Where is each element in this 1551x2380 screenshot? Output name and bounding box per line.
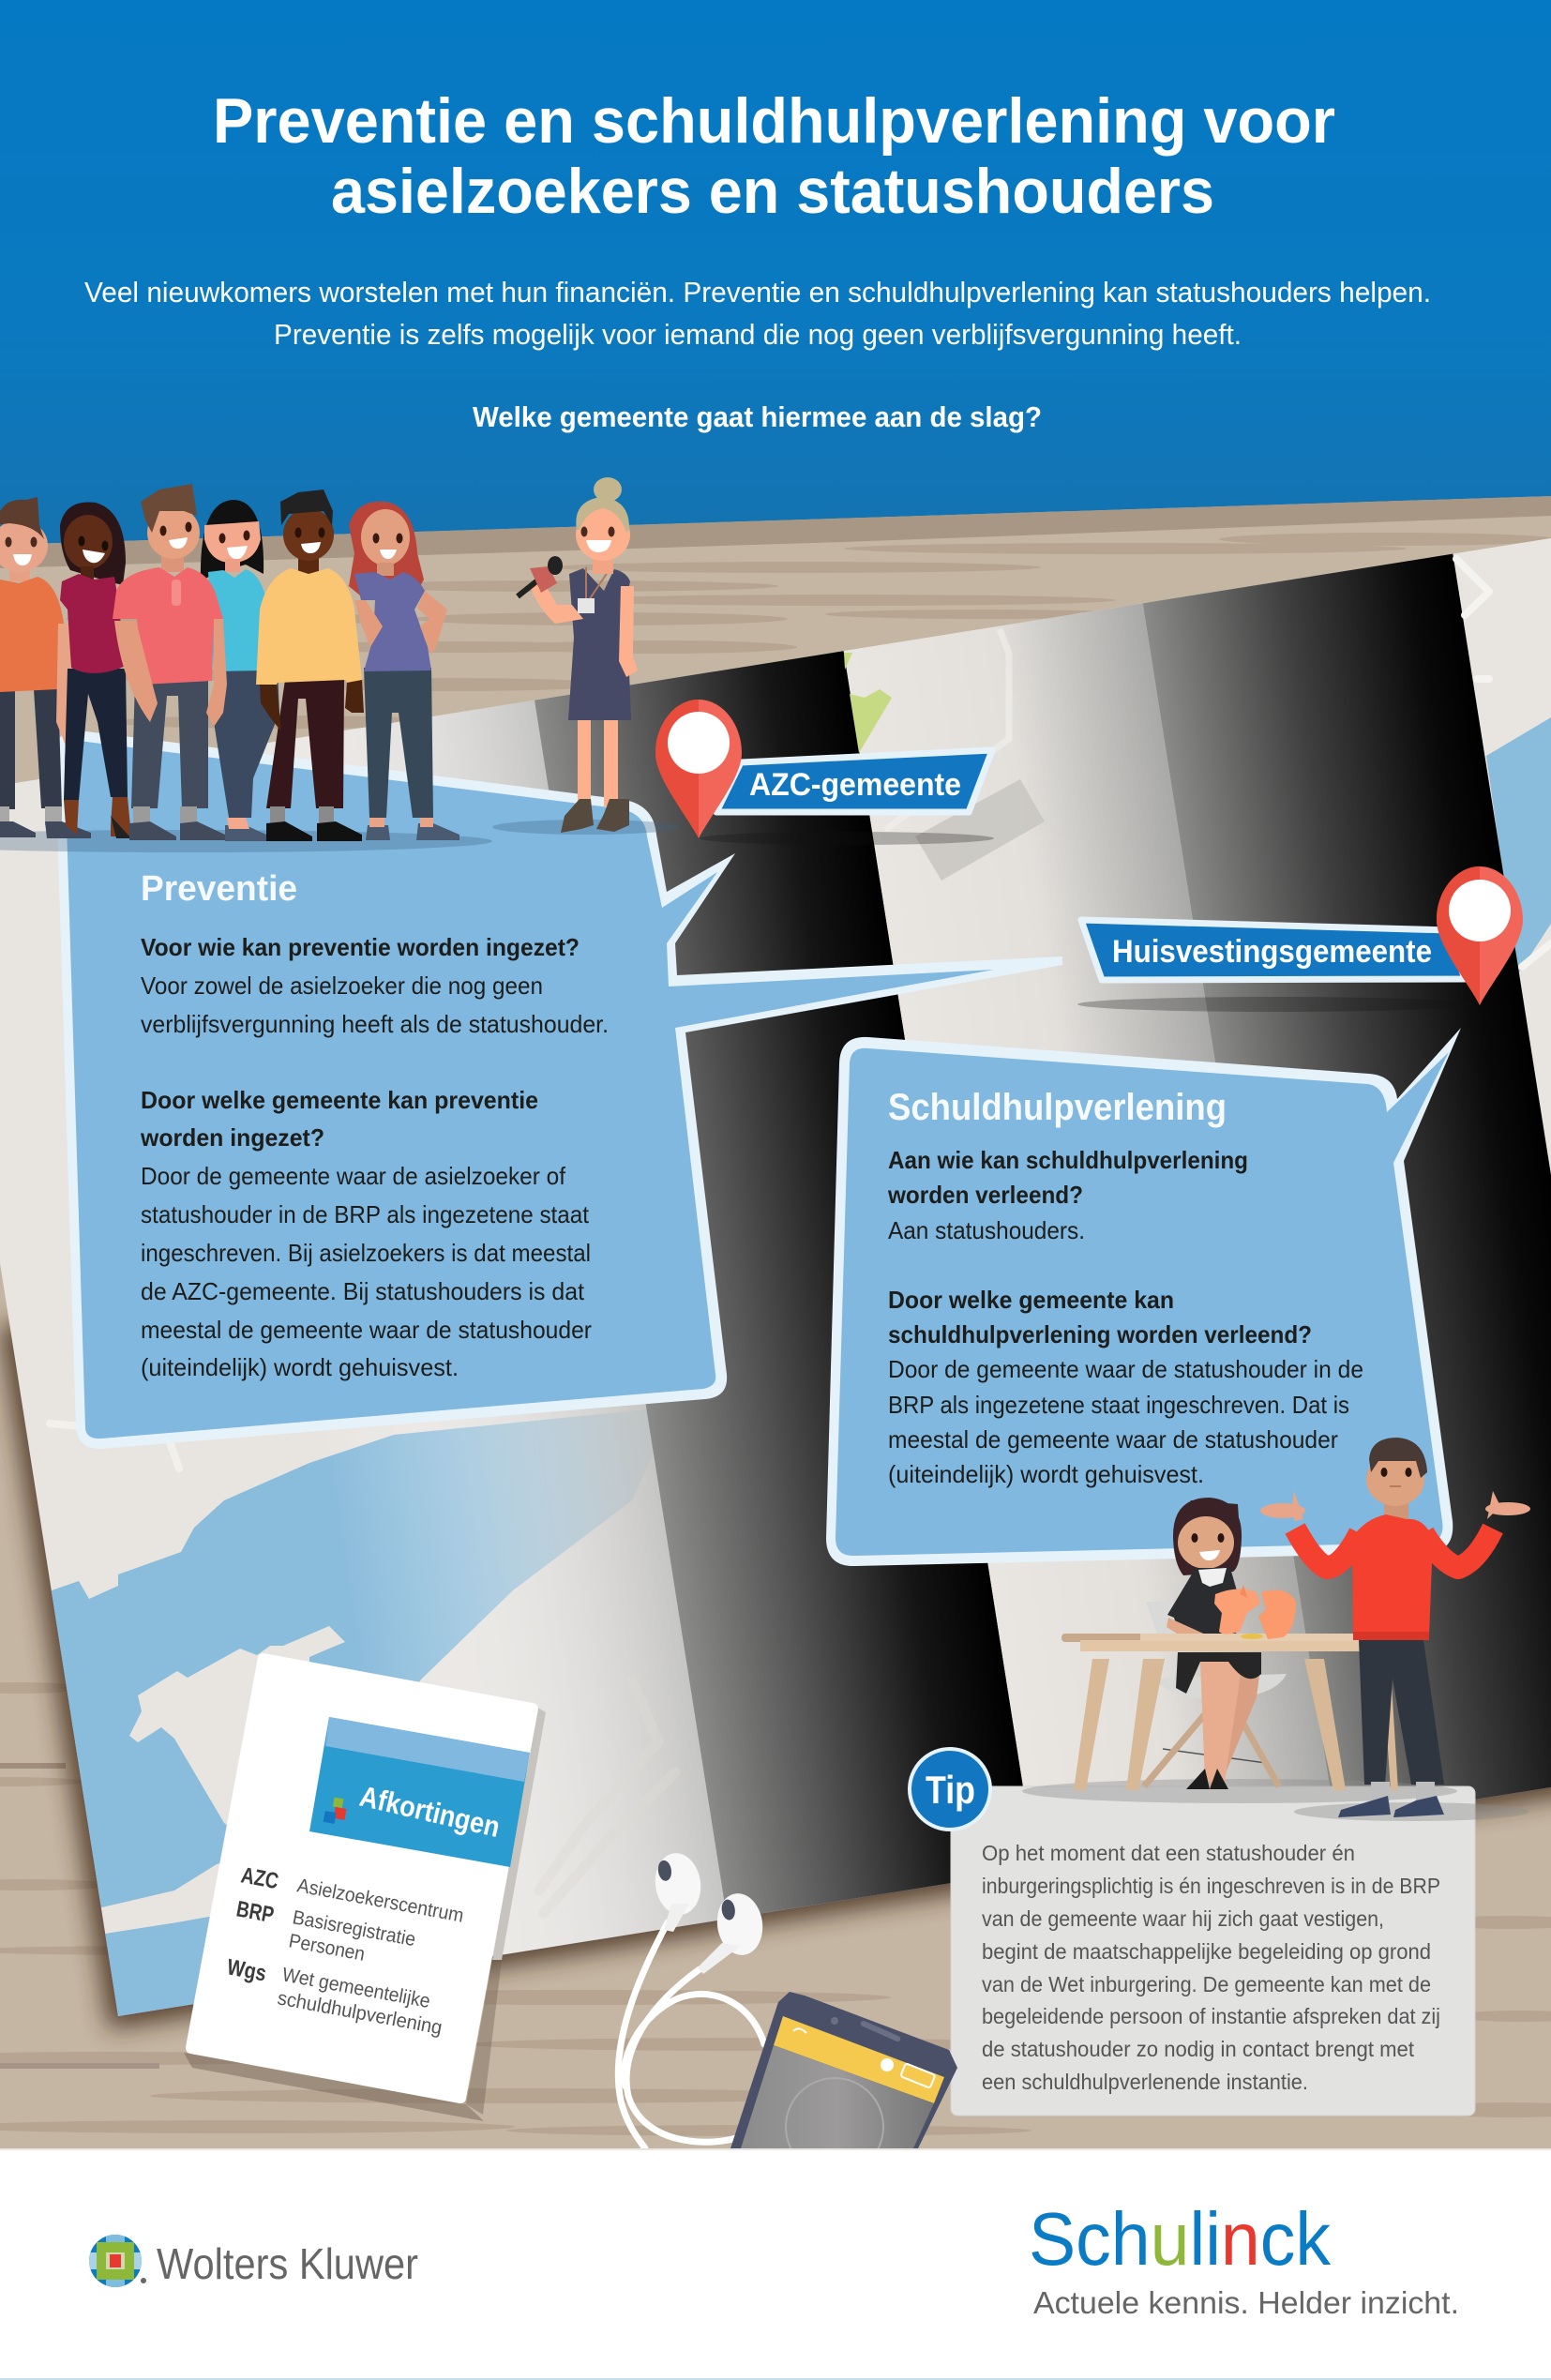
footer (0, 2148, 1551, 2380)
map green area (844, 653, 892, 753)
title (213, 85, 1335, 227)
person: cyan shirt (201, 500, 279, 841)
card header (309, 1717, 530, 1867)
map right roads (1456, 559, 1551, 967)
abbreviations list: Basisregistratie (291, 1906, 417, 1951)
heading: Preventie (141, 869, 297, 909)
microphone (518, 556, 563, 596)
text block (982, 1841, 1440, 2094)
abbreviations list (225, 1862, 465, 2039)
text block: (uiteindelijk) wordt gehuisvest. (888, 1460, 1204, 1488)
text block: inburgeringsplichtig is én ingeschreven is in de BRP (982, 1874, 1440, 1898)
woman at table with piggy bank (1062, 1498, 1398, 1790)
logo: Schulinck: Schulinck (1029, 2197, 1332, 2281)
icon: Tip badge (910, 1749, 990, 1830)
text block: Door de gemeente waar de statushouder in de (888, 1355, 1363, 1383)
icon: earphones (618, 1850, 766, 2148)
text block: Op het moment dat een statushouder én (982, 1841, 1355, 1865)
label: AZC-gemeente: AZC-gemeente (749, 767, 961, 803)
text block: Door welke gemeente kan preventie (141, 1086, 538, 1114)
map diamond over fold repaint (915, 779, 1045, 881)
icon: smartphone (730, 1992, 957, 2176)
icon: broken piggy bank (1214, 1585, 1296, 1639)
intro text: Preventie is zelfs mogelijk voor iemand die nog geen verblijfsvergunning heeft. (274, 318, 1242, 351)
label: Huisvestingsgemeente (1081, 920, 1465, 980)
heading: Schuldhulpverlening (888, 1087, 1227, 1128)
text block: schuldhulpverlening worden verleend? (888, 1320, 1312, 1348)
text block: Aan wie kan schuldhulpverlening (888, 1146, 1248, 1174)
logo: Wolters Kluwer (89, 2235, 418, 2288)
wooden table (0, 496, 1551, 2148)
text block: Voor zowel de asielzoeker die nog geen (141, 972, 543, 1000)
intro text: Veel nieuwkomers worstelen met hun financiën. Preventie en schuldhulpverlening kan statushouders helpen. (84, 276, 1431, 309)
text block: Door de gemeente waar de asielzoeker of (141, 1162, 566, 1190)
text block: meestal de gemeente waar de statushouder (888, 1425, 1338, 1454)
question: Welke gemeente gaat hiermee aan de slag? (473, 400, 1042, 433)
person: yellow sweater (256, 490, 364, 841)
map faded roads (539, 1680, 675, 1913)
text block: worden verleend? (887, 1181, 1083, 1209)
abbreviations list: Personen (287, 1930, 367, 1966)
group of people (0, 484, 459, 841)
hands (1260, 1491, 1530, 1521)
logo: Wolters Kluwer: Wolters Kluwer (157, 2239, 418, 2288)
man with raised hands (1260, 1438, 1530, 1817)
panel: Schuldhulpverlening speech bubble (826, 1028, 1461, 1566)
text block: Door welke gemeente kan (888, 1286, 1174, 1314)
text block: de statushouder zo nodig in contact brengt met (982, 2037, 1415, 2061)
person: magenta shirt (60, 503, 131, 838)
reporter with microphone (518, 477, 638, 833)
text block: begeleidende persoon of instantie afspreken dat zij (982, 2004, 1440, 2028)
text block: Voor wie kan preventie worden ingezet? (141, 933, 580, 961)
logo: Schulinck (1029, 2197, 1459, 2320)
text block: de AZC-gemeente. Bij statushouders is dat (141, 1277, 585, 1305)
abbreviations list: AZC (239, 1862, 280, 1894)
intro text (84, 276, 1431, 351)
text block: BRP als ingezetene staat ingeschreven. Dat is (888, 1391, 1349, 1419)
people shadows (0, 820, 680, 852)
icon: map pin Huisvesting (1437, 866, 1523, 1005)
map right water (1486, 717, 1551, 975)
title: asielzoekers en statushouders (331, 156, 1214, 227)
label shadows (700, 832, 1473, 1012)
logo: Schulinck: Actuele kennis. Helder inzicht. (1033, 2285, 1459, 2320)
table (1062, 1634, 1398, 1790)
person: purple shirt (349, 502, 459, 840)
text block: van de gemeente waar hij zich gaat vestigen, (982, 1906, 1384, 1931)
abbreviations list: Asielzoekerscentrum (295, 1875, 465, 1927)
scene shadows (1022, 1779, 1528, 1821)
folded map (0, 469, 1551, 2110)
map shadow (0, 1232, 1551, 2029)
abbreviations list: Wgs (225, 1954, 268, 1987)
text block: begint de maatschappelijke begeleiding op grond (982, 1939, 1431, 1964)
fold gradients (168, 469, 1551, 2110)
chair (1144, 1602, 1287, 1786)
icon: map pin AZC (655, 700, 742, 838)
abbreviations list: Wet gemeentelijke (280, 1964, 432, 2012)
header background (0, 0, 1551, 581)
text block (140, 933, 609, 1381)
text block: verblijfsvergunning heeft als de statushouder. (141, 1010, 609, 1038)
map green repaint (844, 653, 892, 753)
label: AZC-gemeente (716, 750, 992, 812)
text block: statushouder in de BRP als ingezetene staat (141, 1200, 590, 1228)
card header: Afkortingen (356, 1780, 503, 1844)
person: pink shirt (113, 484, 227, 840)
map roads (46, 613, 1082, 1472)
text block (887, 1146, 1363, 1488)
abbreviations card (184, 1652, 546, 2121)
map road repaint (885, 629, 1009, 830)
text block: van de Wet inburgering. De gemeente kan met de (982, 1972, 1431, 1996)
title: Preventie en schuldhulpverlening voor (213, 85, 1335, 157)
person: orange shirt (0, 497, 91, 838)
map land peninsula (129, 1626, 345, 1838)
label: Huisvestingsgemeente: Huisvestingsgemeente (1112, 934, 1432, 970)
abbreviations list: schuldhulpverlening (276, 1987, 444, 2039)
abbreviations list: BRP (234, 1896, 276, 1928)
text block: ingeschreven. Bij asielzoekers is dat meestal (141, 1239, 591, 1267)
text block: Aan statushouders. (888, 1216, 1085, 1244)
text block: een schuldhulpverlenende instantie. (982, 2070, 1308, 2094)
panel: tip box (951, 1786, 1475, 2116)
text block: (uiteindelijk) wordt gehuisvest. (141, 1353, 459, 1381)
sleeves (1295, 1529, 1493, 1568)
icon: Tip badge: Tip (926, 1768, 975, 1812)
text block: meestal de gemeente waar de statushouder (141, 1316, 592, 1344)
map water lower left (51, 1410, 654, 2016)
text block: worden ingezet? (140, 1123, 324, 1152)
panel: Preventie speech bubble (55, 731, 1062, 1449)
